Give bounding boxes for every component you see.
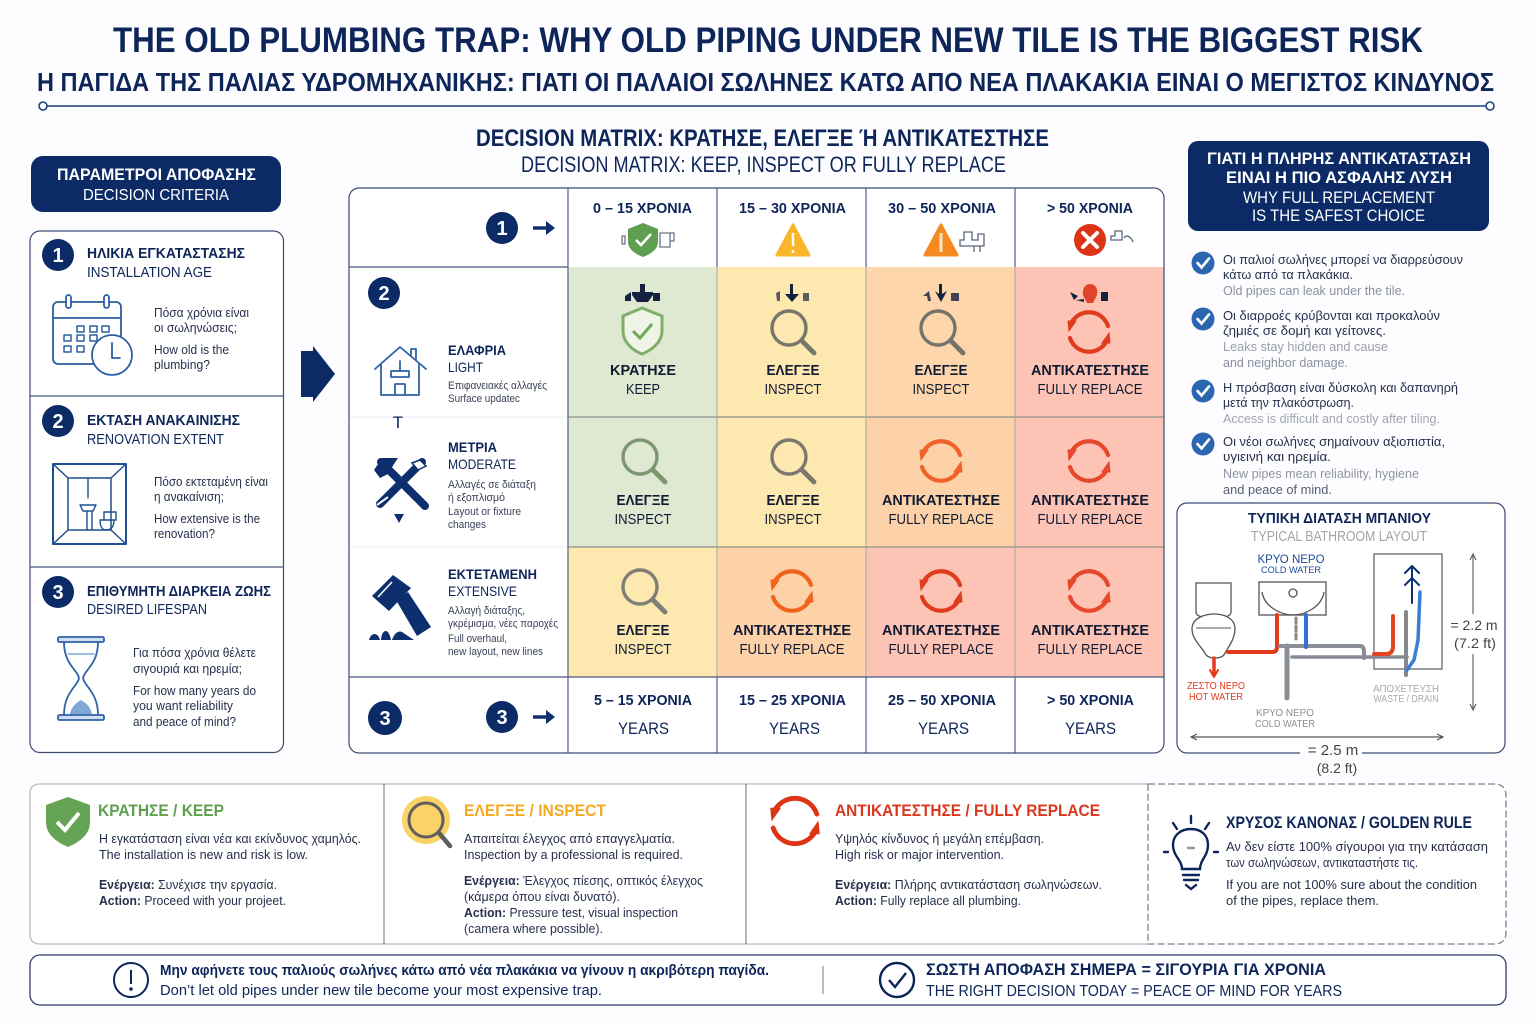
title: English and Greek headline: THE OLD PLUMBING TRAP: WHY OLD PIPING UNDER NEW TILE IS THE BIGGEST RISK: [113, 21, 1423, 60]
legend: keep: ΚΡΑΤΗΣΕ / KEEP: [98, 801, 224, 820]
cell: inspect, row 2 col 2: ΕΛΕΓΞΕ: [766, 492, 820, 509]
reason 1: Old pipes can leak under the tile.: [1223, 284, 1405, 298]
row label: extensive: ΕΚΤΕΤΑΜΕΝΗ: [448, 566, 537, 582]
cell: replace, row 2 col 4: ΑΝΤΙΚΑΤΕΣΤΗΣΕ: [1031, 492, 1149, 509]
legend: keep: [46, 797, 361, 908]
cell: inspect, row 2 col 2: INSPECT: [764, 511, 822, 528]
title: English and Greek headline: [37, 21, 1494, 110]
criterion 3: desired lifespan: σιγουριά και ηρεμία;: [133, 662, 242, 676]
callout: golden rule: If you are not 100% sure about the condition: [1226, 878, 1477, 892]
row label: extensive: new layout, new lines: [448, 646, 543, 658]
icon: hourglass: [58, 637, 104, 720]
legend: replace: ΑΝΤΙΚΑΤΕΣΤΗΣΕ / FULLY REPLACE: [835, 801, 1100, 820]
criterion 2: renovation extent: renovation?: [154, 527, 215, 541]
cell: inspect, row 1 col 3: ΕΛΕΓΞΕ: [914, 362, 968, 379]
bottom headers: lifespan ranges: YEARS: [1065, 719, 1116, 738]
row label: moderate: ΜΕΤΡΙΑ: [448, 439, 497, 455]
cell: inspect, row 3 col 1: INSPECT: [614, 641, 672, 658]
legend: inspect: [402, 796, 703, 936]
row label: light: Επιφανειακές αλλαγές: [448, 380, 547, 392]
panel heading: why full replacement: ΕΙΝΑΙ Η ΠΙΟ ΑΣΦΑΛΗΣ ΛΥΣΗ: [1226, 168, 1452, 187]
reason 4: [1192, 432, 1445, 497]
footer banner: [30, 955, 1506, 1005]
reason 2: [1192, 308, 1440, 370]
cell: replace, row 2 col 3: [882, 441, 1000, 528]
pipes: [1210, 566, 1420, 698]
cell: replace, row 1 col 4: ΑΝΤΙΚΑΤΕΣΤΗΣΕ: [1031, 362, 1149, 379]
cell: replace, row 2 col 4: FULLY REPLACE: [1038, 511, 1142, 528]
matrix cell fills: [349, 188, 1164, 753]
axis marker 1: age: [486, 212, 555, 244]
chart: decision matrix: [349, 188, 1164, 753]
cell: replace, row 3 col 2: ΑΝΤΙΚΑΤΕΣΤΗΣΕ: [733, 622, 851, 639]
legend: keep: Η εγκατάσταση είναι νέα και εκίνδυνος χαμηλός.: [99, 832, 361, 846]
panel heading: why full replacement: IS THE SAFEST CHOICE: [1252, 206, 1425, 225]
heading: decision matrix: [476, 125, 1049, 177]
row label: light: LIGHT: [448, 359, 483, 375]
legend: replace: [771, 798, 1102, 908]
column headers: age ranges: 15 – 30 ΧΡΟΝΙΑ: [739, 200, 846, 217]
heading: decision matrix: DECISION MATRIX: KEEP, INSPECT OR FULLY REPLACE: [521, 152, 1006, 177]
row label: light: Surface updatec: [448, 393, 520, 405]
footer banner: Μην αφήνετε τους παλιούς σωλήνες κάτω από νέα πλακάκια να γίνουν η ακριβότερη παγίδα.: [160, 962, 769, 979]
panel heading: decision criteria: DECISION CRITERIA: [83, 187, 229, 204]
cell: inspect, row 1 col 2: INSPECT: [764, 381, 822, 398]
dimension: width: (8.2 ft): [1317, 760, 1357, 776]
cell: replace, row 3 col 3: FULLY REPLACE: [888, 641, 994, 658]
reason 1: κάτω από τα πλακάκια.: [1223, 268, 1353, 282]
footer banner: Don’t let old pipes under new tile become your most expensive trap.: [160, 982, 602, 999]
dimension: height: (7.2 ft): [1454, 635, 1496, 651]
cell: keep, row 1 col 1: KEEP: [626, 381, 660, 398]
panel: action legend: [30, 784, 1148, 944]
dimension: width: [1191, 734, 1443, 776]
pipe labels: COLD WATER: [1255, 718, 1315, 730]
callout: golden rule: Αν δεν είστε 100% σίγουροι για την κατάσαση: [1226, 840, 1488, 854]
column headers: age ranges: > 50 ΧΡΟΝΙΑ: [1047, 200, 1133, 217]
icon: crossed tools: [374, 458, 426, 523]
panel: decision criteria list: [30, 231, 284, 752]
cell: inspect, row 3 col 1: [614, 570, 672, 658]
criterion 3: desired lifespan: 3: [52, 582, 64, 604]
axis marker 3: lifespan: [368, 701, 555, 735]
criterion 1: installation age: Πόσα χρόνια είναι: [154, 306, 249, 320]
pipe labels: COLD WATER: [1261, 565, 1321, 576]
reason 1: [1192, 252, 1463, 298]
legend: inspect: Ενέργεια: Έλεγχος πίεσης, οπτικός έλεγχος: [464, 874, 703, 888]
criterion 2: renovation extent: 2: [52, 411, 64, 433]
criterion 3: desired lifespan: ΕΠΙΘΥΜΗΤΗ ΔΙΑΡΚΕΙΑ ΖΩΗΣ: [87, 583, 271, 600]
bottom headers: lifespan ranges: YEARS: [618, 719, 669, 738]
toilet: [1192, 583, 1235, 658]
reason 4: New pipes mean reliability, hygiene: [1223, 467, 1419, 481]
row label: extensive: [369, 566, 558, 658]
icon: yellow warning: [777, 225, 809, 255]
bottom headers: lifespan ranges: YEARS: [769, 719, 820, 738]
criterion 3: desired lifespan: Για πόσα χρόνια θέλετε: [133, 646, 256, 660]
legend: inspect: (κάμερα όπου είναι δυνατό).: [464, 890, 620, 904]
criterion 1: installation age: INSTALLATION AGE: [87, 265, 212, 281]
reason 4: and peace of mind.: [1223, 483, 1332, 497]
criterion 1: installation age: ΗΛΙΚΙΑ ΕΓΚΑΤΑΣΤΑΣΗΣ: [87, 245, 245, 262]
heading: decision matrix: DECISION MATRIX: ΚΡΑΤΗΣΕ, ΕΛΕΓΞΕ Ή ΑΝΤΙΚΑΤΕΣΤΗΣΕ: [476, 125, 1049, 152]
reason 2: Οι διαρροές κρύβονται και προκαλούν: [1223, 309, 1440, 323]
criterion 3: desired lifespan: For how many years do: [133, 684, 256, 698]
row label: moderate: ή εξοπλισμό: [448, 492, 505, 504]
checklist: reasons: [1192, 252, 1463, 497]
criterion 3: desired lifespan: and peace of mind?: [133, 715, 236, 729]
reason 4: Οι νέοι σωλήνες σημαίνουν αξιοπιστία,: [1223, 435, 1445, 449]
cell: replace, row 3 col 3: ΑΝΤΙΚΑΤΕΣΤΗΣΕ: [882, 622, 1000, 639]
callout: golden rule: ΧΡΥΣΟΣ ΚΑΝΟΝΑΣ / GOLDEN RULE: [1226, 813, 1472, 832]
legend: inspect: ΕΛΕΓΞΕ / INSPECT: [464, 801, 607, 820]
column headers: age ranges: 30 – 50 ΧΡΟΝΙΑ: [888, 200, 996, 217]
icon: green shield: [46, 797, 90, 847]
row label: extensive: Full overhaul,: [448, 633, 507, 645]
footer banner: ΣΩΣΤΗ ΑΠΟΦΑΣΗ ΣΗΜΕΡΑ = ΣΙΓΟΥΡΙΑ ΓΙΑ ΧΡΟΝΙΑ: [926, 960, 1326, 979]
bottom headers: lifespan ranges: 25 – 50 ΧΡΟΝΙΑ: [888, 692, 996, 709]
row label: light: [375, 342, 547, 405]
icon: replace cycle: [771, 798, 819, 844]
reason 3: Η πρόσβαση είναι δύσκολη και δαπανηρή: [1223, 381, 1458, 395]
row label: moderate: MODERATE: [448, 456, 516, 472]
legend: inspect: Απαιτείται έλεγχος από επαγγελματία.: [464, 832, 675, 846]
cell: replace, row 3 col 2: FULLY REPLACE: [740, 641, 844, 658]
criterion 3: desired lifespan: [42, 576, 271, 729]
panel heading: why full replacement: ΓΙΑΤΙ Η ΠΛΗΡΗΣ ΑΝΤΙΚΑΤΑΣΤΑΣΗ: [1207, 149, 1471, 168]
cell: replace, row 2 col 4: [1031, 441, 1149, 528]
row label: extensive: Αλλαγή διάταξης,: [448, 605, 525, 617]
criterion 1: installation age: [42, 239, 249, 375]
bottom headers: lifespan ranges: [594, 692, 1134, 738]
icon: sledgehammer and rubble: [369, 575, 431, 640]
cell: keep, row 1 col 1: [610, 308, 676, 398]
panel heading: decision criteria: [31, 156, 281, 212]
row label: moderate: Layout or fixture: [448, 506, 521, 518]
cell: replace, row 3 col 3: [882, 571, 1000, 658]
reason 2: and neighbor damage.: [1223, 356, 1348, 370]
cell: keep, row 1 col 1: ΚΡΑΤΗΣΕ: [610, 362, 676, 379]
cell: replace, row 2 col 3: FULLY REPLACE: [888, 511, 994, 528]
panel: typical bathroom layout: TYPICAL BATHROOM LAYOUT: [1251, 529, 1427, 545]
callout: golden rule: of the pipes, replace them.: [1226, 894, 1379, 908]
criterion 2: renovation extent: ΕΚΤΑΣΗ ΑΝΑΚΑΙΝΙΣΗΣ: [87, 412, 240, 429]
cell: inspect, row 2 col 2: [764, 440, 822, 528]
cell: inspect, row 1 col 2: [764, 311, 822, 398]
cell: replace, row 3 col 4: FULLY REPLACE: [1038, 641, 1142, 658]
legend: inspect: Inspection by a professional is required.: [464, 848, 683, 862]
criterion 2: renovation extent: η ανακαίνιση;: [154, 490, 224, 504]
pipe labels: ΚΡΥΟ ΝΕΡΟ: [1256, 707, 1314, 719]
row label: light: ΕΛΑΦΡΙΑ: [448, 342, 506, 358]
cell: inspect, row 1 col 3: INSPECT: [912, 381, 970, 398]
cell: replace, row 1 col 4: [1031, 312, 1149, 398]
marker T: T: [393, 413, 403, 432]
icon: exclamation circle: [114, 963, 148, 997]
row label: moderate: Αλλαγές σε διάταξη: [448, 479, 536, 491]
cell: replace, row 3 col 4: ΑΝΤΙΚΑΤΕΣΤΗΣΕ: [1031, 622, 1149, 639]
cell: inspect, row 2 col 1: INSPECT: [614, 511, 672, 528]
cell: inspect, row 1 col 3: [912, 311, 970, 398]
reason 4: υγιεινή και ηρεμία.: [1223, 450, 1331, 464]
footer banner: THE RIGHT DECISION TODAY = PEACE OF MIND FOR YEARS: [926, 983, 1342, 1000]
axis marker 2: renovation: [368, 277, 400, 309]
legend: inspect: Action: Pressure test, visual inspection: [464, 906, 678, 920]
pipe labels: HOT WATER: [1189, 691, 1243, 703]
reason 1: Οι παλιοί σωλήνες μπορεί να διαρρεύσουν: [1223, 253, 1463, 267]
cell: replace, row 2 col 3: ΑΝΤΙΚΑΤΕΣΤΗΣΕ: [882, 492, 1000, 509]
panel: typical bathroom layout: ΤΥΠΙΚΗ ΔΙΑΤΑΣΗ ΜΠΑΝΙΟΥ: [1248, 510, 1431, 527]
criterion 1: installation age: plumbing?: [154, 358, 210, 372]
criterion 3: desired lifespan: you want reliability: [133, 699, 234, 713]
callout: golden rule: [1148, 784, 1506, 944]
legend: keep: The installation is new and risk is low.: [99, 848, 308, 862]
icon: red cross: [1074, 224, 1133, 256]
row label: moderate: [374, 439, 536, 531]
cell: inspect, row 3 col 1: ΕΛΕΓΞΕ: [616, 622, 670, 639]
criterion 3: desired lifespan: DESIRED LIFESPAN: [87, 602, 207, 618]
reason 3: μετά την πλακόστρωση.: [1223, 396, 1354, 410]
row label: extensive: EXTENSIVE: [448, 583, 517, 599]
column headers: age ranges: [593, 200, 1133, 217]
icon: orange warning: [925, 225, 984, 255]
dimension: width: = 2.5 m: [1308, 742, 1358, 759]
reason 3: Access is difficult and costly after tiling.: [1223, 412, 1440, 426]
reason 2: Leaks stay hidden and cause: [1223, 340, 1388, 354]
criterion 2: renovation extent: [42, 405, 268, 544]
axis marker 3: lifespan: 3: [379, 708, 391, 730]
panel heading: why full replacement: WHY FULL REPLACEMENT: [1243, 188, 1435, 207]
pipe labels: ΖΕΣΤΟ ΝΕΡΟ: [1187, 680, 1245, 692]
panel heading: decision criteria: ΠΑΡΑΜΕΤΡΟΙ ΑΠΟΦΑΣΗΣ: [57, 165, 256, 184]
legend: inspect: (camera where possible).: [464, 922, 603, 936]
panel heading: why full replacement: [1188, 141, 1489, 231]
legend: replace: Υψηλός κίνδυνος ή μεγάλη επέμβαση.: [835, 832, 1044, 846]
callout: golden rule: των σωληνώσεων, αντικαταστήστε τις.: [1226, 856, 1418, 870]
pipe labels: ΚΡΥΟ ΝΕΡΟ: [1257, 554, 1325, 566]
panel: typical bathroom layout: [1177, 503, 1505, 776]
criterion 1: installation age: How old is the: [154, 343, 229, 357]
dimension: height: [1449, 554, 1499, 710]
dimension: height: = 2.2 m: [1450, 617, 1498, 633]
icon: bathroom room: [53, 464, 126, 544]
icon: light bulb: [1164, 816, 1218, 889]
criterion 1: installation age: οι σωληνώσεις;: [154, 321, 237, 335]
legend: replace: Ενέργεια: Πλήρης αντικατάσταση σωληνώσεων.: [835, 878, 1102, 892]
column headers: age ranges: 0 – 15 ΧΡΟΝΙΑ: [593, 200, 692, 217]
bottom headers: lifespan ranges: 15 – 25 ΧΡΟΝΙΑ: [739, 692, 846, 709]
cell: replace, row 1 col 4: FULLY REPLACE: [1038, 381, 1142, 398]
pipe labels: [1187, 554, 1439, 730]
icon: house: [375, 347, 426, 395]
sink: [1259, 582, 1326, 615]
criterion 2: renovation extent: Πόσο εκτεταμένη είναι: [154, 475, 268, 489]
icon: check circle: [880, 963, 914, 997]
wall box: [1374, 554, 1442, 669]
cell: inspect, row 2 col 1: ΕΛΕΓΞΕ: [616, 492, 670, 509]
cell: inspect, row 2 col 1: [614, 440, 672, 528]
reason 2: ζημιές σε δομή και γείτονες.: [1223, 324, 1386, 338]
arrow: criteria to matrix: [301, 346, 335, 402]
criterion 1: installation age: 1: [52, 245, 64, 267]
bottom headers: lifespan ranges: YEARS: [918, 719, 969, 738]
axis marker 3: lifespan: 3: [496, 707, 508, 729]
bottom headers: lifespan ranges: > 50 ΧΡΟΝΙΑ: [1047, 692, 1134, 709]
row label: extensive: γκρέμισμα, νέες παροχές: [448, 618, 558, 630]
icon: magnifier on yellow: [402, 796, 450, 846]
bottom headers: lifespan ranges: 5 – 15 ΧΡΟΝΙΑ: [594, 692, 692, 709]
axis marker 1: age: 1: [496, 218, 508, 240]
row label: moderate: changes: [448, 519, 486, 531]
cell: inspect, row 1 col 2: ΕΛΕΓΞΕ: [766, 362, 820, 379]
pipe labels: ΑΠΟΧΕΤΕΥΣΗ: [1373, 684, 1439, 695]
legend: replace: Action: Fully replace all plumbing.: [835, 894, 1021, 908]
icon: green shield status: [622, 223, 674, 257]
small pipe marks above row 1 icons: [625, 284, 1108, 303]
pipe labels: WASTE / DRAIN: [1374, 694, 1438, 705]
legend: replace: High risk or major intervention.: [835, 848, 1004, 862]
criterion 2: renovation extent: How extensive is the: [154, 512, 260, 526]
reason 3: [1192, 380, 1458, 426]
legend: keep: Ενέργεια: Συνέχισε την εργασία.: [99, 878, 277, 892]
criterion 2: renovation extent: RENOVATION EXTENT: [87, 432, 224, 448]
axis marker 2: renovation: 2: [378, 283, 390, 305]
legend: keep: Action: Proceed with your projeet.: [99, 894, 286, 908]
cell: replace, row 3 col 2: [733, 571, 851, 658]
icon: calendar with clock: [53, 295, 132, 375]
cell: replace, row 3 col 4: [1031, 571, 1149, 658]
